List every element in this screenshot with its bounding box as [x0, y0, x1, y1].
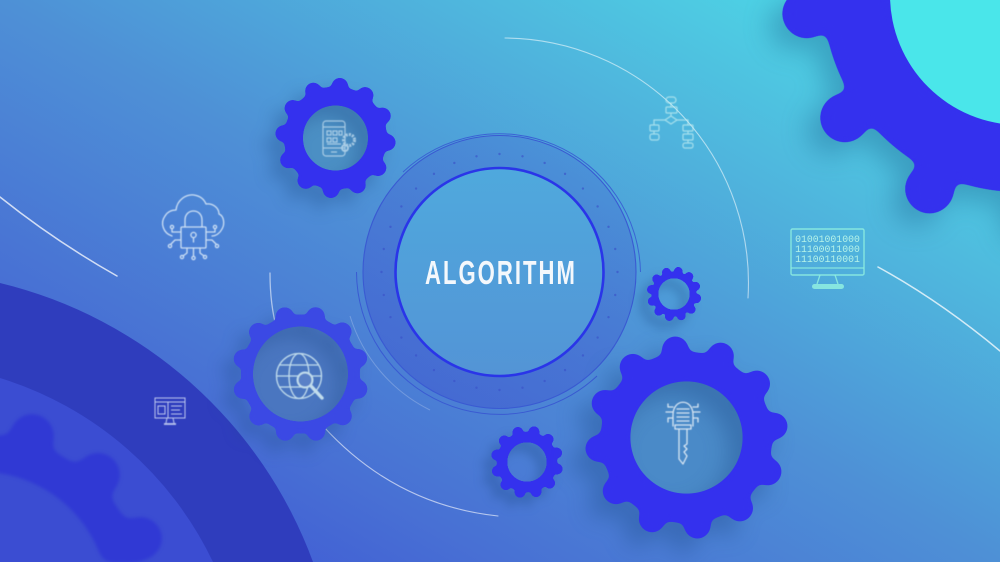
gear: digital key: [570, 321, 803, 554]
gear: mobile app: [279, 82, 392, 194]
gear: small right: [647, 267, 701, 321]
title: ALGORITHM: [425, 255, 577, 291]
gear: global search: [228, 301, 373, 447]
icon: circuit key: [666, 402, 700, 464]
gear hole: [890, 0, 1000, 125]
icon: binary monitor: 11100110001: [795, 254, 860, 265]
icon: phone with gear: [323, 121, 354, 156]
central algorithm badge: [350, 134, 640, 414]
icon: dashboard monitor: [155, 398, 185, 424]
icon: globe and magnifier: [276, 354, 322, 398]
ring band: [380, 152, 620, 392]
icon: flowchart: [650, 97, 693, 148]
dotted track: [382, 154, 618, 390]
gear: top-right corner: [761, 0, 1000, 238]
faint corner gear: [0, 414, 162, 562]
icon: binary monitor: 11100011000: [795, 244, 860, 255]
icon: cloud security lock: [163, 195, 224, 260]
gear: small bottom: [490, 425, 564, 499]
inner disc: [396, 168, 604, 376]
outer arcs: [403, 134, 640, 272]
icon: binary monitor: 01001001000: [795, 234, 860, 245]
icon: binary monitor: [791, 229, 864, 289]
